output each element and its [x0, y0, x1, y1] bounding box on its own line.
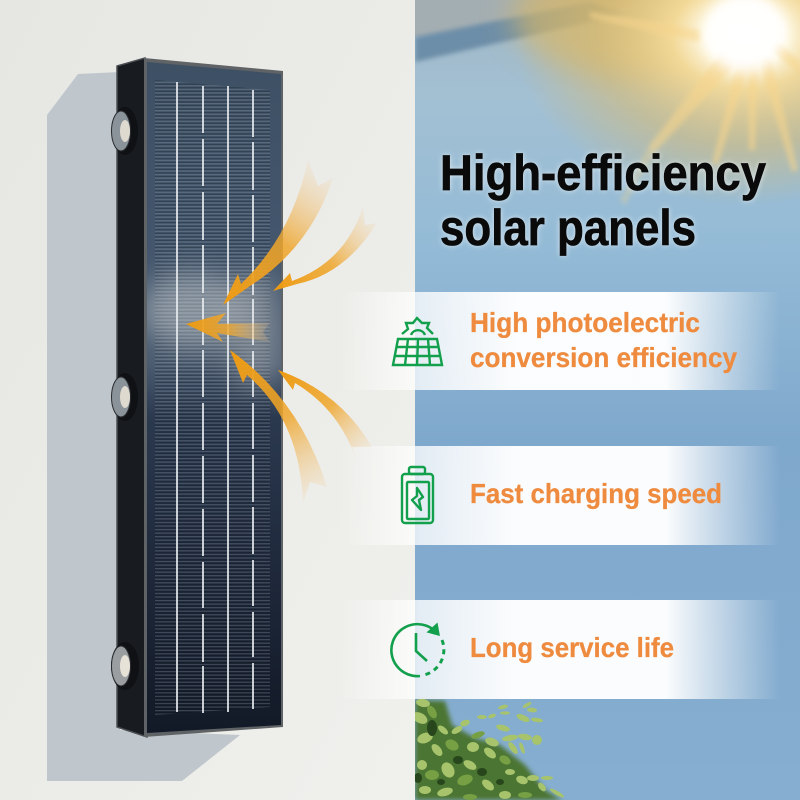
arrow middle: [186, 313, 270, 342]
solar lamp product: [111, 58, 283, 737]
solar cell lines: [155, 80, 270, 715]
wall background: [0, 0, 415, 800]
lamp lens bottom: [111, 642, 139, 690]
wall shadow of the lamp: [47, 72, 240, 781]
feature band 2: [340, 446, 780, 545]
title: [440, 145, 766, 256]
arrow upper: [223, 160, 333, 305]
reflected light haze right: [229, 270, 281, 390]
title: solar panels: [440, 200, 696, 256]
arrow upper right: [273, 207, 377, 291]
icon: solar panel with sun: [393, 318, 442, 365]
busbars: [177, 82, 253, 713]
reflected light haze: [140, 272, 250, 348]
lamp body side: [117, 58, 147, 737]
feature text 3: Long service life: [470, 632, 674, 663]
feature text 1: conversion efficiency: [470, 342, 737, 373]
feature band 1: [340, 292, 780, 390]
icon: battery charging: [402, 467, 433, 523]
feature text 2: Fast charging speed: [470, 478, 722, 509]
feature text 1: High photoelectric: [470, 307, 700, 338]
solar panel face: [140, 60, 282, 736]
arrow lower: [230, 350, 327, 503]
icon: clock with arrow: [391, 624, 444, 676]
sunlight arrows: [186, 160, 377, 503]
lamp lens middle: [112, 373, 138, 421]
title: solar panels: [440, 200, 696, 256]
title: High-efficiency: [440, 145, 766, 201]
lamp lens top: [112, 107, 138, 155]
lamp frame: [144, 58, 283, 737]
foliage: [411, 698, 565, 800]
arrow lower right: [278, 370, 372, 462]
title: High-efficiency: [440, 145, 766, 201]
sky background with sun: [415, 0, 800, 800]
feature band 3: [340, 600, 780, 699]
